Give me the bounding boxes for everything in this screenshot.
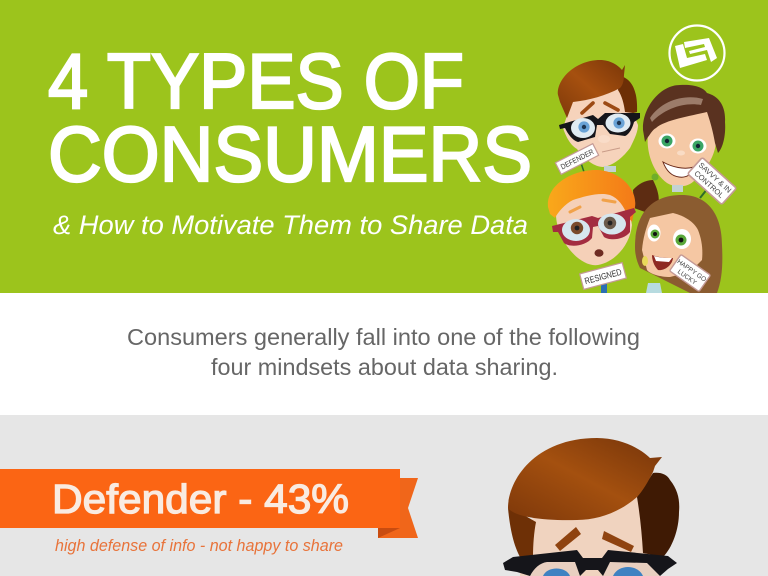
glasses — [503, 550, 677, 576]
label: happy go lucky sign: HAPPY GO — [676, 258, 707, 284]
label: savvy sign: SAVVY & IN — [697, 161, 733, 195]
header panel — [0, 0, 768, 293]
intro panel — [0, 293, 768, 415]
character: savvy — [633, 85, 736, 212]
text: defender description: high defense of info - not happy to share — [55, 536, 343, 555]
character: resigned — [548, 170, 636, 293]
glasses — [559, 113, 640, 142]
panel: defender — [0, 415, 768, 576]
character: large defender — [503, 438, 679, 576]
intro text: four mindsets about data sharing. — [211, 354, 558, 380]
title: CONSUMERS — [48, 110, 532, 198]
icon: logo — [670, 26, 724, 80]
label: defender sign: DEFENDER — [559, 147, 596, 171]
glasses — [552, 208, 636, 246]
title — [48, 37, 532, 198]
label: resigned sign: RESIGNED — [583, 267, 623, 286]
label: happy go lucky sign: LUCKY — [676, 268, 698, 287]
character: happy go lucky — [635, 195, 722, 293]
title: 4 TYPES OF — [48, 37, 464, 125]
intro text — [127, 324, 640, 380]
label: happy go lucky sign — [670, 254, 710, 292]
intro text: Consumers generally fall into one of the following — [127, 324, 640, 350]
label: savvy sign: CONTROL — [692, 169, 726, 200]
subtitle: & How to Motivate Them to Share Data — [53, 210, 528, 240]
heading: defender: Defender - 43% — [52, 476, 349, 522]
ribbon — [0, 469, 418, 538]
label: savvy sign — [688, 157, 736, 205]
character: defender — [555, 60, 640, 174]
